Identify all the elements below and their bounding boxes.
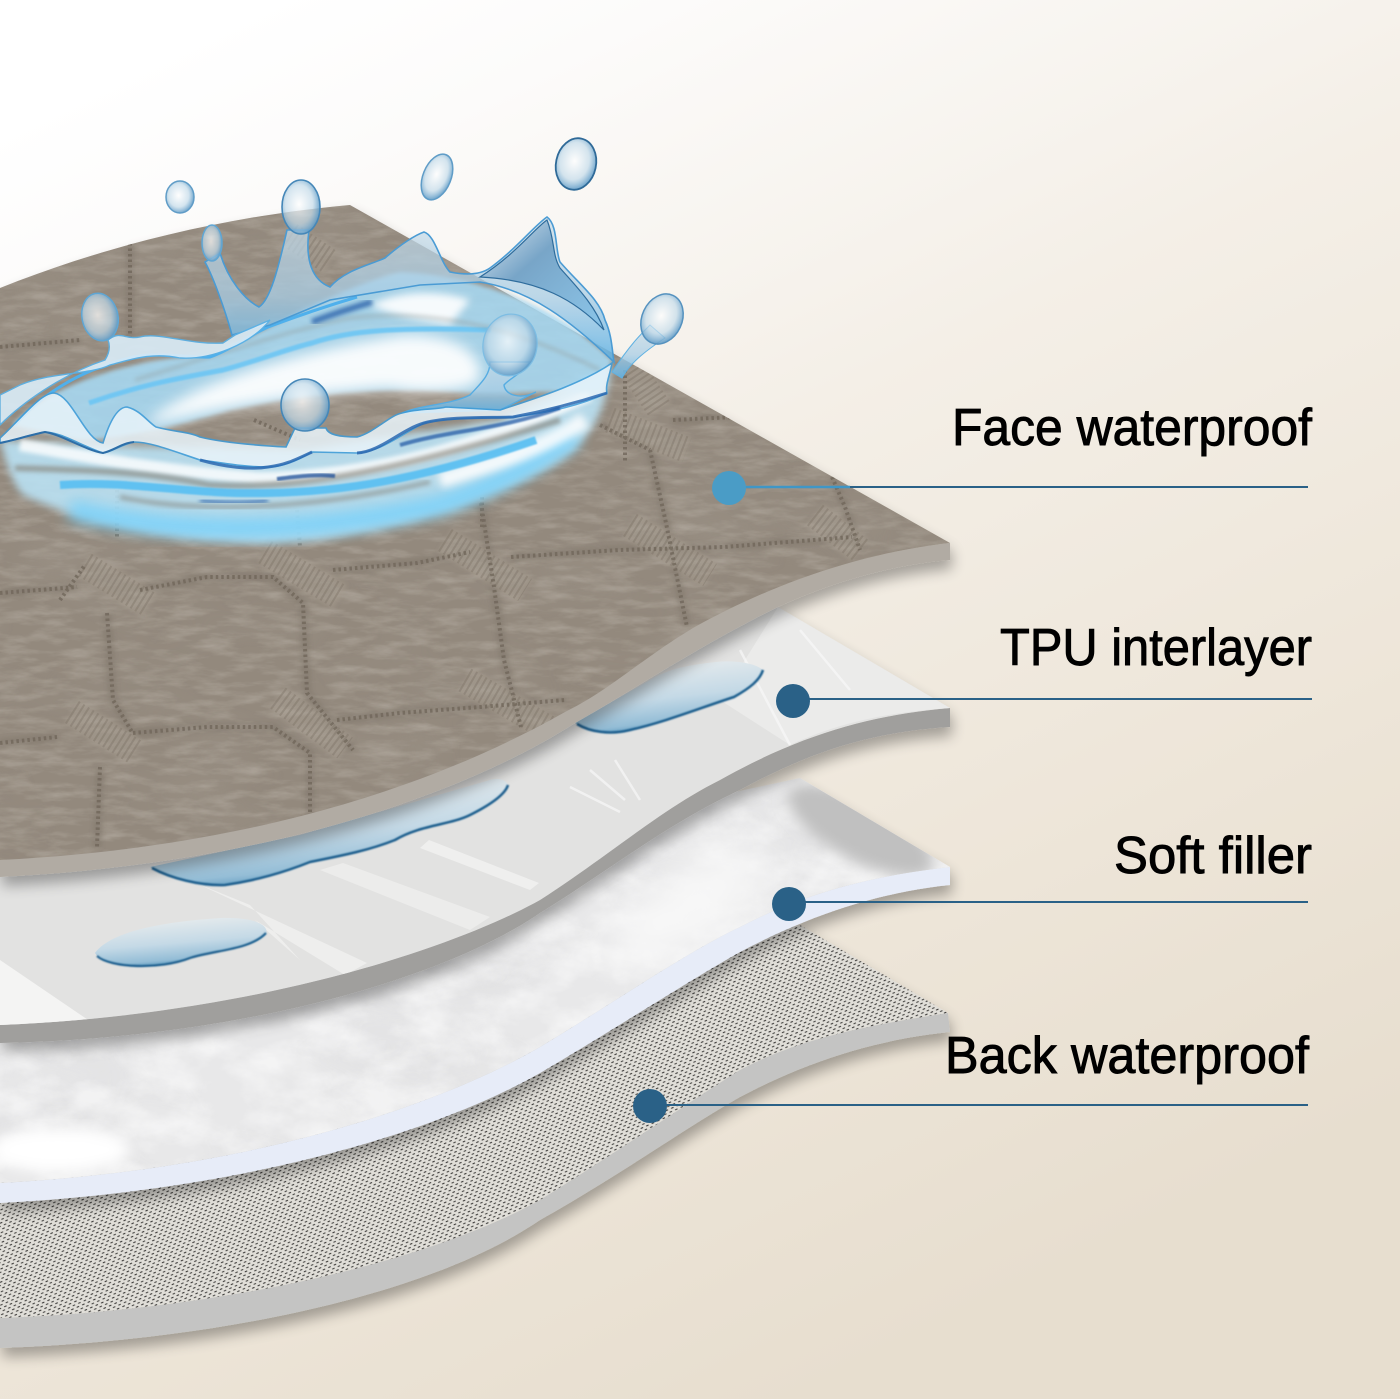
callout: Back waterproof bbox=[633, 1027, 1310, 1123]
water splash crown bbox=[0, 134, 691, 543]
callout: Soft filler: Soft filler bbox=[1114, 827, 1312, 885]
callout: TPU interlayer bbox=[776, 619, 1312, 718]
splash bowl bbox=[0, 365, 612, 543]
diagonal stitched bands bbox=[72, 235, 860, 752]
splash spike: inner centre drop bbox=[281, 379, 329, 431]
splash spike: tall centre drop bbox=[282, 180, 320, 234]
layer: TPU interlayer bbox=[0, 607, 950, 1043]
layer: back waterproof bbox=[0, 925, 950, 1348]
left rim with far-left spike bbox=[0, 320, 270, 425]
splash spike: thin left drop bbox=[202, 225, 222, 261]
callout: Soft filler bbox=[772, 827, 1312, 921]
soft seam shading bbox=[0, 243, 860, 847]
splash spike: inner right drop bbox=[402, 362, 536, 413]
quilted hexagon stitching bbox=[0, 200, 950, 870]
water bead: upper right bbox=[575, 661, 763, 732]
free droplets bbox=[166, 134, 601, 213]
zigzag seam lines bbox=[0, 243, 860, 847]
callout: Face waterproof: Face waterproof bbox=[952, 399, 1313, 457]
callout: TPU interlayer: TPU interlayer bbox=[1000, 619, 1312, 677]
layer: soft filler bbox=[0, 766, 950, 1203]
right peak shading bbox=[480, 220, 604, 330]
callout: Face waterproof bbox=[712, 399, 1313, 505]
front rim and peaks bbox=[0, 363, 612, 467]
water bead: middle bbox=[150, 779, 508, 885]
back wall bbox=[12, 272, 612, 440]
back rim with upward spikes bbox=[205, 217, 614, 362]
splash spike: far right drop bbox=[612, 325, 665, 378]
callout: Back waterproof: Back waterproof bbox=[945, 1027, 1310, 1085]
bowl light blue glow bbox=[70, 435, 575, 528]
layer: face waterproof bbox=[0, 200, 950, 877]
water bead: lower left bbox=[95, 918, 267, 966]
